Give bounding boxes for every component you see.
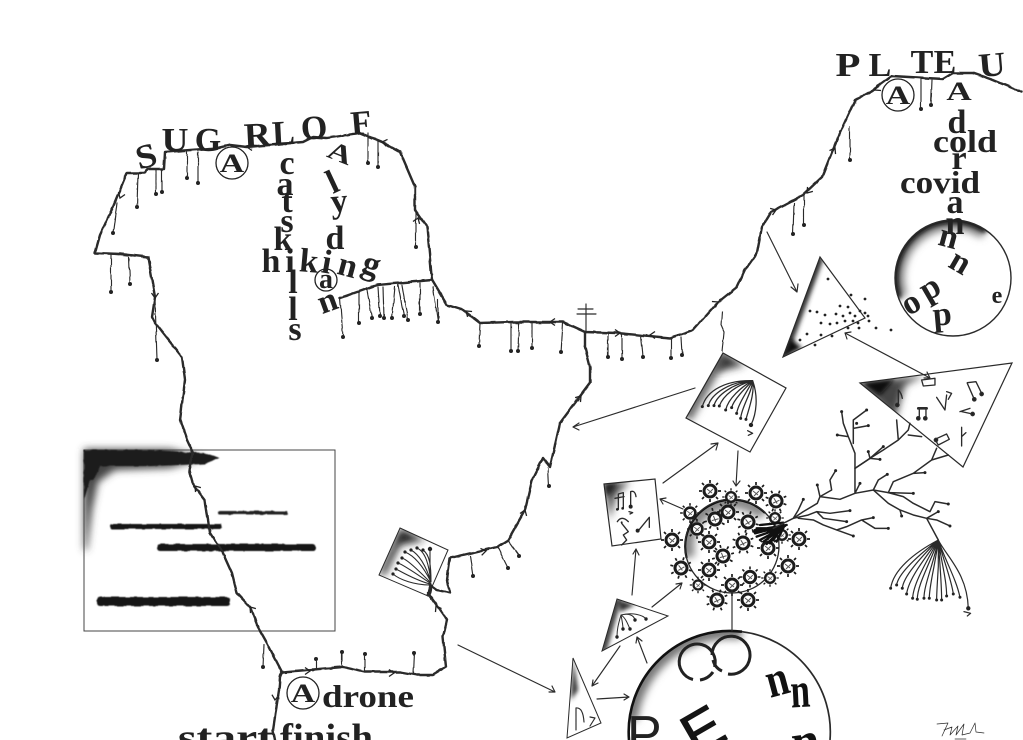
title: PLATEAU summit label: L [869, 47, 891, 84]
fan diagram [701, 381, 756, 435]
branching tree network [753, 408, 971, 616]
circled a [315, 264, 337, 295]
text: hiking horizontal word: i [319, 244, 335, 282]
circled A on Plateau: A [886, 81, 910, 110]
title: PLATEAU summit label: A [946, 76, 972, 106]
panel: dot triangle [783, 257, 892, 357]
scattered dots [799, 278, 892, 346]
text: hiking horizontal word: h [262, 243, 281, 280]
bar 4 [97, 597, 230, 606]
panel: tilted square with fan diagram [686, 353, 786, 452]
text: cold covid word stack [894, 104, 1003, 334]
text: valley letters with circled a: l [320, 164, 345, 201]
label: circled A drone: drone [322, 678, 414, 714]
text: valley letters with circled a [312, 164, 349, 322]
trail side stems with end dots [111, 78, 932, 673]
overlapping rings [679, 636, 750, 680]
text: catskills vertical word: s [280, 203, 294, 240]
text: cold covid word stack: e [992, 283, 1003, 309]
connecting line between circles [731, 590, 733, 631]
label: circled A drone [287, 677, 414, 714]
panel: large letter circle [627, 631, 830, 740]
title: SUGARLOAF summit label: L [271, 114, 296, 153]
text: catskills vertical word [274, 145, 302, 348]
text: cold covid word stack: p [931, 295, 953, 334]
text: catskills vertical word: l [288, 291, 298, 328]
text: catskills vertical word: l [288, 264, 298, 301]
panel: large letter circle: n [789, 664, 811, 719]
text: catskills vertical word: s [288, 311, 302, 348]
text: valley letters with circled a: y [329, 182, 349, 221]
text: hiking horizontal word: n [334, 246, 362, 286]
panel: music note triangle [860, 363, 1012, 467]
text: hiking horizontal word: i [285, 243, 295, 280]
text: catskills vertical word: c [279, 145, 295, 182]
text: cold covid word stack: r [951, 140, 967, 177]
text: cold covid word stack: n [935, 217, 963, 257]
text: cold covid word stack: p [912, 267, 947, 309]
text: cold covid word stack: n [943, 241, 978, 283]
text: cold covid word stack: a [946, 184, 964, 221]
direction chevrons on the trail [117, 84, 881, 700]
title: SUGARLOAF summit label: U [161, 121, 189, 159]
text: valley letters with circled a: d [326, 220, 345, 257]
title: SUGARLOAF summit label [131, 104, 373, 179]
title: PLATEAU summit label: U [977, 44, 1007, 85]
bar 1 [218, 511, 288, 514]
stem end dots [109, 103, 933, 669]
trail cross marker [577, 304, 596, 333]
title: SUGARLOAF summit label: O [299, 109, 329, 148]
music notes [896, 378, 983, 446]
circled A on Sugarloaf: A [220, 149, 244, 178]
title: PLATEAU summit label: P [836, 47, 860, 84]
title: PLATEAU summit label [836, 44, 1007, 111]
text: cold covid word stack: o [894, 283, 927, 323]
title: SUGARLOAF summit label: F [349, 104, 373, 143]
circled a: a [319, 264, 333, 295]
large dotted fan [889, 540, 971, 616]
title: SUGARLOAF summit label: R [243, 115, 273, 154]
title: PLATEAU summit label: E [934, 44, 956, 81]
flow arrows [458, 232, 930, 700]
panel: virus circle [661, 480, 810, 614]
text: cold covid word stack: d [948, 104, 967, 141]
text: hiking horizontal word [262, 242, 386, 286]
text: cold covid word stack: n [946, 205, 965, 242]
text: catskills vertical word: a [276, 166, 294, 203]
virus particles [661, 480, 810, 614]
title: SUGARLOAF summit label: A [323, 135, 357, 171]
panel: square with music notes [604, 479, 661, 546]
title: SUGARLOAF summit label: G [195, 122, 221, 159]
panel: shaded rectangle with horizontal bars [84, 449, 335, 631]
label: start finish [178, 717, 373, 740]
circled A on Sugarloaf [216, 147, 248, 179]
title: SUGARLOAF summit label: S [131, 135, 161, 177]
label: circled A drone: A [291, 679, 315, 708]
text: hiking horizontal word: k [298, 242, 320, 281]
panel: tall narrow triangle with note [567, 658, 601, 738]
artist signature [937, 723, 984, 739]
text: valley letters with circled a: n [312, 280, 343, 322]
text: hiking horizontal word: g [357, 244, 386, 284]
panel: large letter circle: n [759, 649, 795, 709]
circled A on Plateau [882, 79, 914, 111]
text: cold covid word stack: cold [933, 123, 997, 159]
panel: shaded circle with falling letters [895, 220, 1011, 336]
panel: small tilted square with dotted fan [379, 528, 448, 596]
title: PLATEAU summit label: T [911, 44, 934, 81]
text: catskills vertical word: k [274, 221, 293, 258]
text: catskills vertical word: t [281, 183, 293, 220]
notes [615, 491, 649, 545]
bar 2 [110, 524, 222, 529]
text: cold covid word stack: covid [900, 164, 980, 200]
dark root tuft [753, 523, 787, 544]
panel: small triangle with fan [602, 599, 668, 651]
bar 3 [157, 544, 316, 551]
